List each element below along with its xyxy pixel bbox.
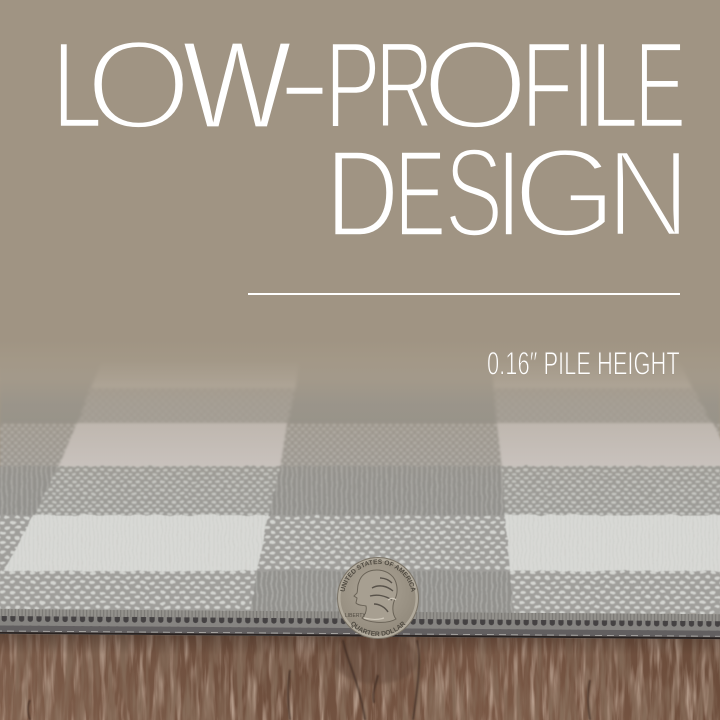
title line 2: D: [326, 124, 399, 262]
title line 2: I: [496, 124, 521, 262]
title line 1: W: [183, 17, 292, 154]
title: LOW-PROFILE DESIGN: [52, 12, 690, 264]
title line 1: L: [52, 16, 103, 154]
rug binding edge: [0, 609, 720, 639]
title line 1: R: [375, 17, 434, 155]
title line 2: G: [512, 121, 618, 264]
title line 2: N: [606, 124, 690, 263]
coin portrait: [354, 570, 397, 622]
checked rug: [0, 340, 720, 639]
title line 1: L: [590, 16, 639, 154]
wood floor: [0, 625, 720, 720]
title line 1: O: [421, 15, 529, 156]
subtitle: pile height: 0.16″ PILE HEIGHT: [487, 345, 680, 382]
title line 1: E: [634, 16, 686, 154]
coin lettering: UNITED STATES OF AMERICA: [340, 559, 416, 592]
title line 1: [52, 12, 686, 156]
title line 1: O: [85, 14, 192, 156]
rug row with blurred white blocks: [0, 423, 720, 469]
divider rule: [248, 293, 680, 295]
title line 1: F: [521, 16, 573, 154]
rug rows far: [0, 360, 720, 426]
top fade into background: [0, 340, 720, 540]
rug near rows: [0, 515, 720, 615]
coin denomination: QUARTER DOLLAR: [351, 622, 406, 636]
quarter coin: [337, 557, 419, 639]
rug middle row: [0, 466, 720, 518]
title line 1: I: [571, 15, 596, 154]
coin liberty: LIBERTY: [345, 613, 366, 619]
title line 2: E: [394, 124, 446, 262]
title line 2: [326, 121, 690, 264]
title line 1: -: [277, 12, 332, 150]
title line 1: P: [325, 16, 381, 154]
title line 2: S: [444, 123, 503, 264]
